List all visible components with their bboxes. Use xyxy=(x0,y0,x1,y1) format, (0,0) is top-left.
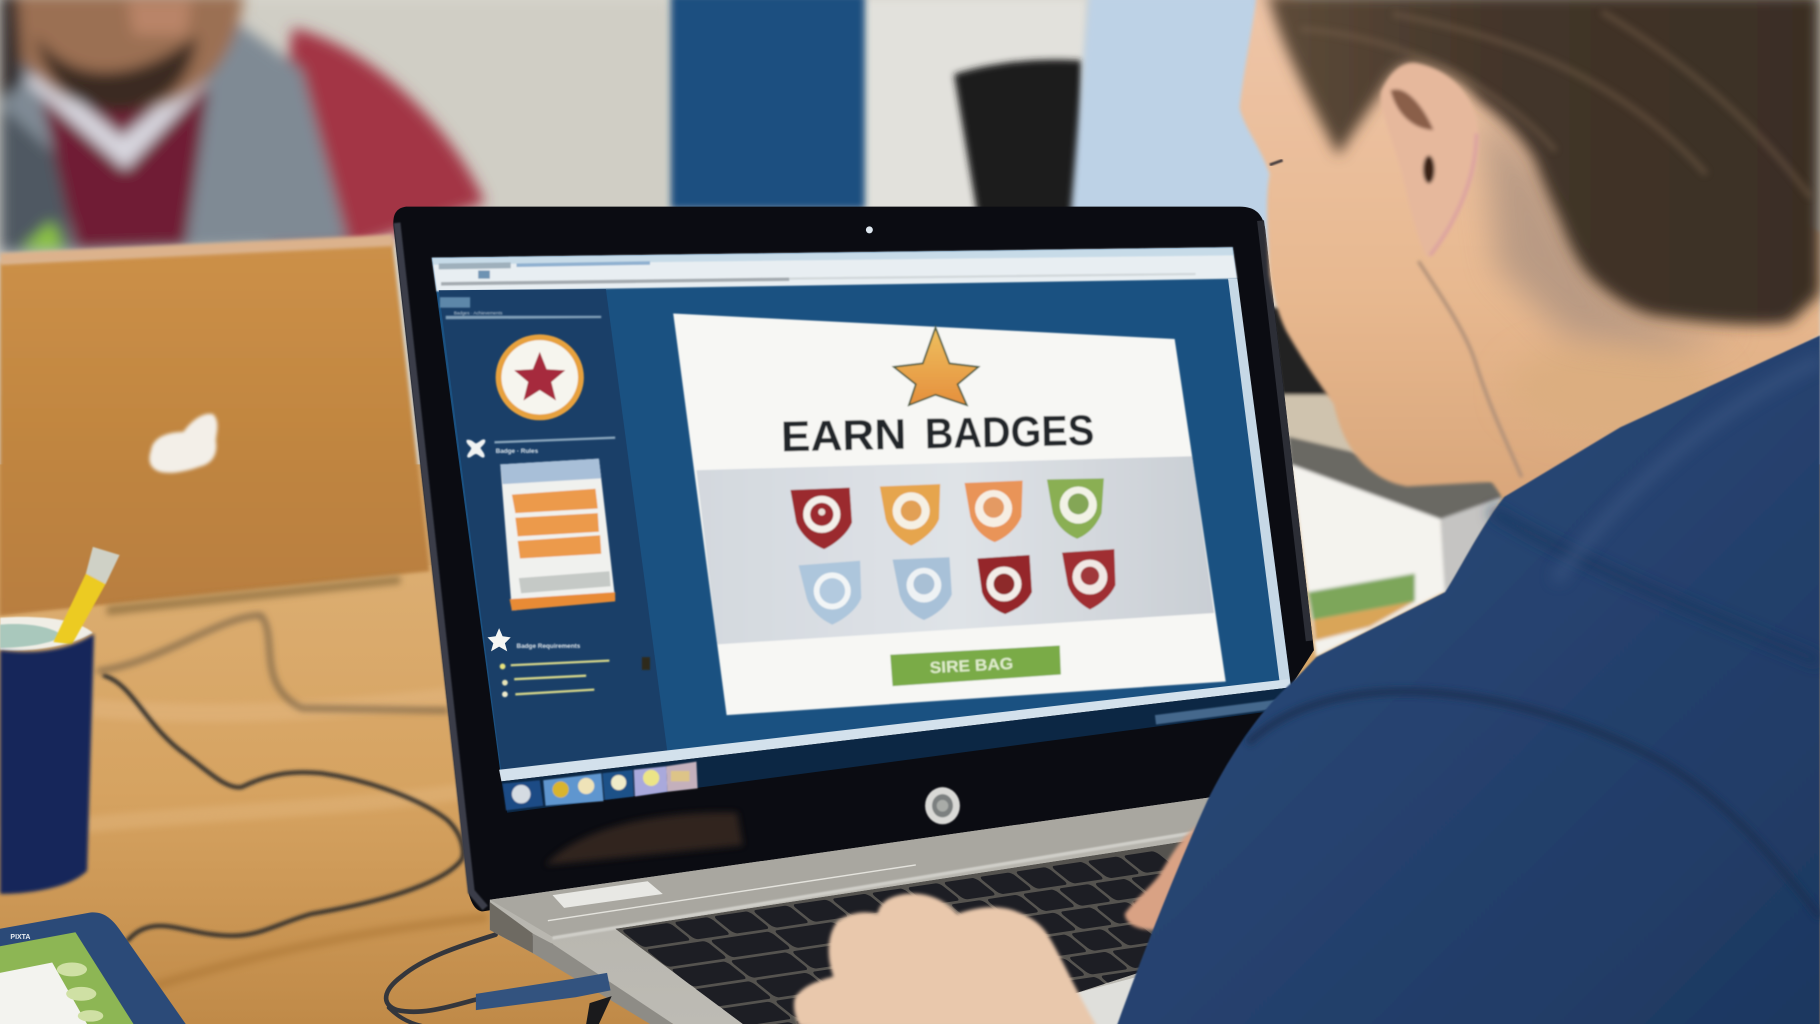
mini document with orange bars xyxy=(500,459,615,611)
grey badge band xyxy=(696,456,1214,644)
keyboard xyxy=(616,842,1184,1024)
front left silver strip xyxy=(533,933,673,1024)
side edge of laptop xyxy=(490,902,533,953)
green call to action button: SIRE BAG xyxy=(929,655,1014,677)
sidebar small labels xyxy=(494,437,615,455)
front palm rest right xyxy=(1074,975,1143,1024)
black office chair xyxy=(954,60,1085,215)
upper deck panel xyxy=(490,796,1216,937)
wooden desk xyxy=(0,557,1393,1024)
sidebar panel xyxy=(439,289,667,772)
pencil xyxy=(53,547,120,644)
blue coffee mug with pencil xyxy=(0,547,120,894)
browser toolbar xyxy=(432,247,1237,291)
tablet on the desk: PIXTA xyxy=(10,934,30,941)
lid glare reflection xyxy=(546,812,743,865)
blue pillar xyxy=(671,0,865,209)
person in light blue shirt xyxy=(1070,0,1277,255)
badge light blue xyxy=(893,557,952,620)
laptop base and keyboard deck xyxy=(476,798,1210,1024)
main badge card xyxy=(673,313,1226,715)
white star icon xyxy=(488,628,511,651)
taskbar icons xyxy=(503,762,698,810)
background wall and office xyxy=(0,0,1820,464)
laptop lid shadow xyxy=(107,576,400,615)
neck crease behind jaw xyxy=(1418,261,1522,477)
badge red xyxy=(790,488,852,549)
star medal xyxy=(496,334,584,420)
port gap xyxy=(533,936,569,961)
neck lit area xyxy=(1509,342,1718,435)
eyelash xyxy=(1270,160,1283,165)
front silver deck xyxy=(490,796,1216,1024)
mug inside xyxy=(0,617,93,651)
green call to action button xyxy=(890,646,1061,686)
badge orange xyxy=(965,481,1023,542)
white ribbon icon xyxy=(466,439,485,458)
badge pale blue xyxy=(799,561,861,625)
hair strands xyxy=(1300,12,1811,197)
badge dark red xyxy=(1062,549,1115,610)
cables on the desk xyxy=(99,615,496,1024)
laptop lid with black bezel xyxy=(393,207,1314,911)
laptop screen xyxy=(432,247,1292,813)
hp logo xyxy=(925,787,960,824)
badge green xyxy=(1047,478,1104,539)
right screen edge highlight xyxy=(1228,279,1291,687)
USB charger plug xyxy=(476,973,612,1024)
blurred colleague in background xyxy=(0,0,485,255)
apple logo xyxy=(149,414,217,473)
sidebar bullet list: Badge Requirements xyxy=(517,643,581,650)
hoodie hem seam xyxy=(1248,692,1820,917)
sidebar header xyxy=(440,297,601,319)
taskbar strip xyxy=(501,687,1292,813)
card title: EARN xyxy=(780,411,907,461)
card title: BADGES xyxy=(924,407,1095,458)
card title xyxy=(780,407,1095,461)
hair xyxy=(1263,0,1820,325)
ear xyxy=(1381,63,1479,258)
stack of books and items behind the laptop xyxy=(1271,308,1503,657)
badge crimson xyxy=(977,555,1032,614)
orange laptop in background xyxy=(0,235,429,615)
white sticker on deck xyxy=(552,881,663,908)
mug body xyxy=(0,634,94,894)
screen desktop xyxy=(432,247,1291,780)
card star xyxy=(894,327,978,405)
white taskbar edge xyxy=(499,679,1292,781)
system tray xyxy=(1155,699,1283,724)
woman's neck and face xyxy=(1240,0,1820,499)
hand on keyboard xyxy=(794,819,1209,1024)
badge amber xyxy=(880,484,940,546)
sidebar small labels: Badge · Rules xyxy=(496,448,539,455)
webcam dot xyxy=(866,226,873,233)
sidebar header: Badges · Achievements xyxy=(454,311,503,316)
woman's navy hoodie xyxy=(1117,336,1820,1024)
tablet on the desk xyxy=(0,912,186,1024)
sidebar bullet list xyxy=(500,643,650,697)
neck shadow near hairline xyxy=(1480,104,1741,348)
desk wood grain xyxy=(0,697,488,998)
